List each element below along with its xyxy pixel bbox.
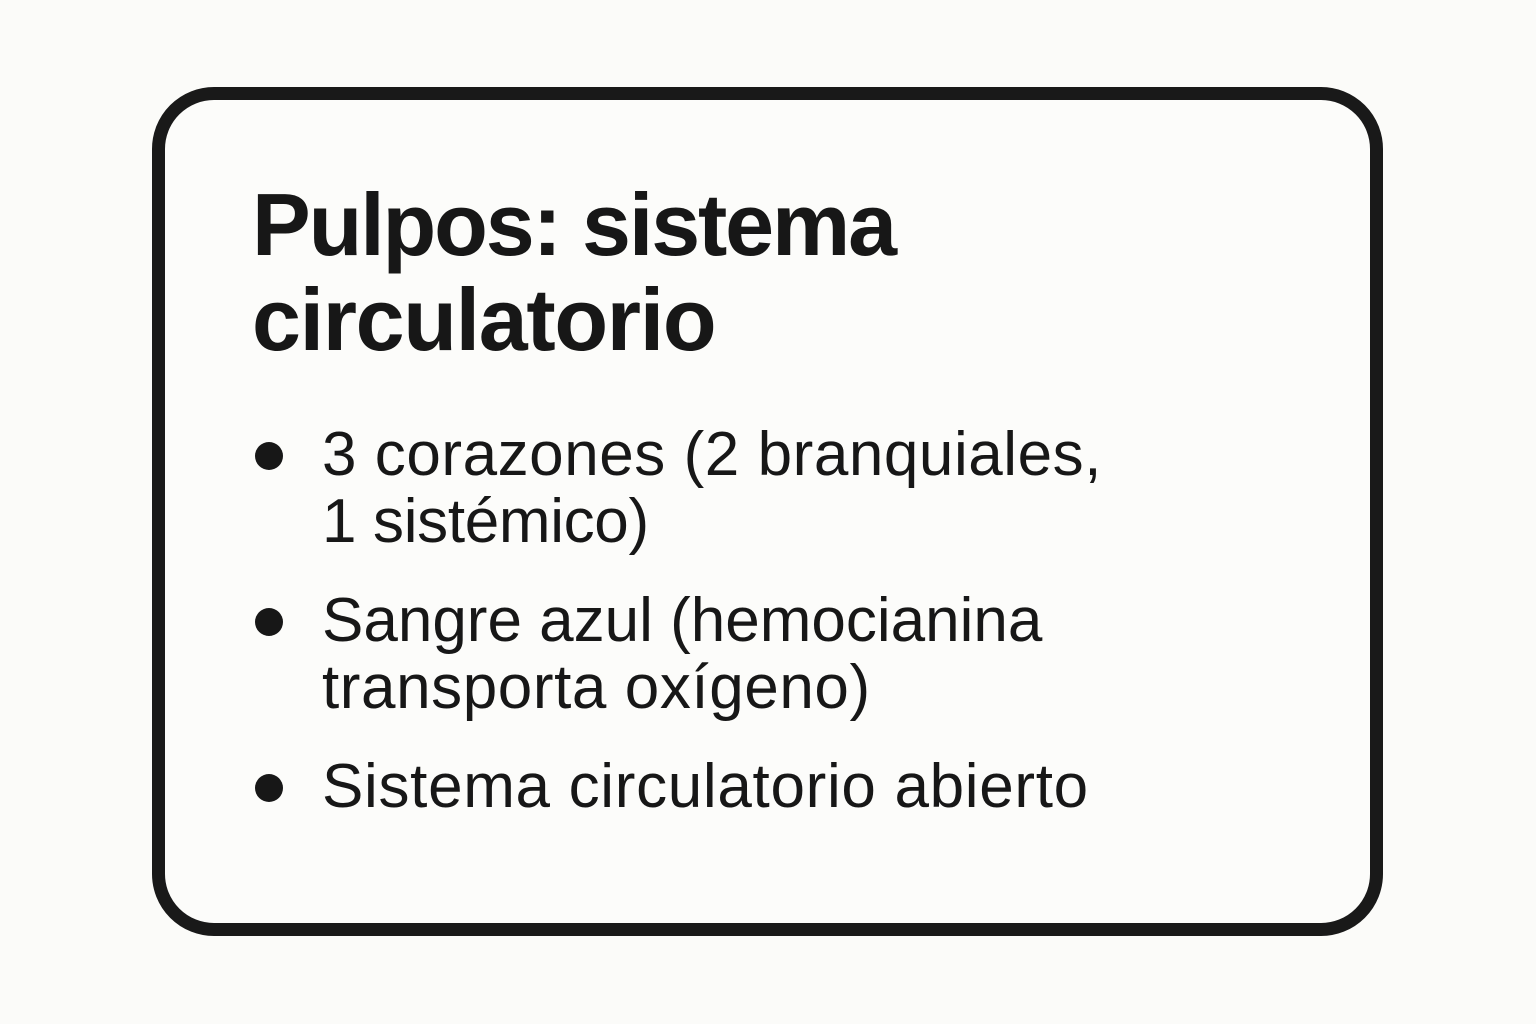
bullet 2 xyxy=(255,586,1042,722)
bullet 3: Sistema circulatorio abierto xyxy=(322,752,1089,820)
bullet 1: 3 corazones (2 branquiales, xyxy=(322,420,1102,488)
bullet 1: 1 sistémico) xyxy=(322,487,649,556)
bullet 2: Sangre azul (hemocianina xyxy=(322,586,1042,654)
bullet 2: transporta oxígeno) xyxy=(322,653,871,722)
title: circulatorio xyxy=(252,270,715,369)
panel: card xyxy=(152,87,1383,936)
title: Pulpos: sistema xyxy=(252,175,895,274)
bullet 1 xyxy=(255,420,1102,556)
title xyxy=(252,175,898,369)
